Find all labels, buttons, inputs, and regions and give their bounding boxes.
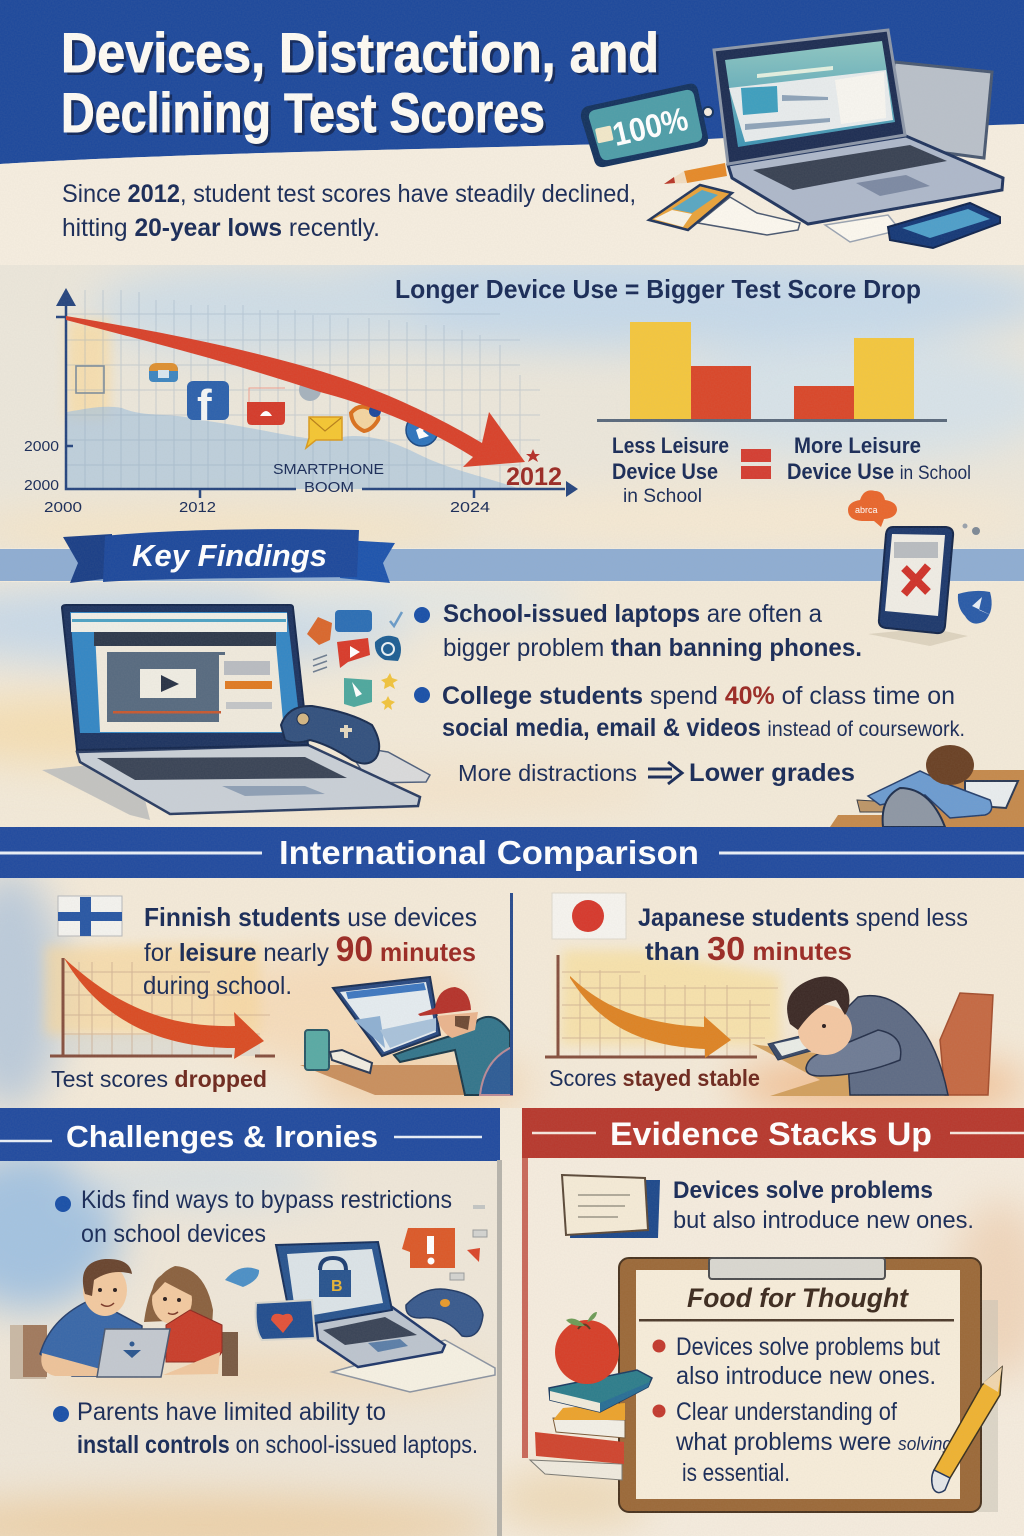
illustration: books and apple [530,1312,652,1480]
panel left border [522,1158,528,1458]
clipboard [619,1258,981,1512]
icon: globe [299,379,321,401]
icon: envelope [306,417,342,448]
axis labels: 2000 [24,478,59,494]
axis labels: 2000 [24,439,59,455]
intro text: hitting 20-year lows recently. [62,214,380,242]
game controller [281,706,379,764]
blue hills [67,407,520,489]
icon: video [247,388,285,425]
bullet: college students: social media, email & videos instead of coursework. [442,714,965,742]
key findings section wash [0,582,644,826]
shadow behind clipboard [978,1300,998,1512]
flag of Finland [58,896,122,936]
phone on desk [649,185,732,230]
panel: Evidence Stacks Up [522,1108,1024,1512]
vertical divider [510,893,513,1095]
bullet: solve problems: also introduce new ones. [676,1362,936,1390]
empty square marker [76,366,104,393]
left bar label: Less Leisure [612,433,729,458]
bar chart: leisure device use [395,274,971,507]
bullet: understanding: is essential. [682,1459,790,1487]
right bar label: Device Use in School [787,459,971,484]
international comparison header: International Comparison [279,834,699,871]
illustration: locked laptop and accessories: B [331,1278,343,1295]
intro background wash [0,124,1024,265]
shared laptop [97,1329,170,1377]
flag of Japan [552,893,626,939]
bullet: solve problems: Devices solve problems but [676,1333,940,1361]
right bar label [787,433,971,484]
axis labels: 2024 [450,500,490,516]
key findings ribbon: Key Findings [132,538,327,573]
Japan chart [545,950,780,1058]
international comparison header [0,827,1024,878]
bullet: college students: College students spend 40% of class time on [442,682,955,710]
laptop screen [714,30,905,164]
bullet: bypass restrictions: Kids find ways to bypass restrictions [81,1186,452,1214]
icon: document stack [562,1175,660,1238]
bullet: parental controls [53,1398,478,1459]
laptop screen [62,605,308,750]
distractions result: Lower grades [689,759,855,787]
findings text [414,600,965,787]
100% badge [581,84,713,167]
axes [56,300,565,498]
header band [0,0,1024,164]
illustration: locked laptop and accessories [225,1205,495,1392]
Finland result: Test scores dropped [51,1066,267,1092]
icon: blue badge [406,414,438,446]
icon: speech bubble: abrca [855,505,878,515]
Japan text: Japanese students spend less [638,904,968,932]
bullet: laptops [414,600,862,662]
second screen [893,62,992,158]
icon: speech bubble [848,490,897,527]
title: Declining Test Scores [61,81,545,144]
Finland text: during school. [143,972,292,1000]
illustration: laptop with video [42,605,430,820]
2012 callout: 2012 [506,463,562,491]
evidence header: Evidence Stacks Up [610,1116,932,1152]
illustration: student asleep at desk [830,745,1024,827]
smartphone boom label [273,461,384,496]
Japan text: than 30 minutes [645,930,852,967]
illustration: student resting on desk [752,976,993,1096]
bullet: understanding: what problems were solving [675,1428,952,1456]
smartphone boom label: BOOM [304,479,354,496]
Finland text: for leisure nearly 90 minutes [144,930,476,969]
illustration: pencil [932,1367,1002,1493]
bullet: laptops: bigger problem than banning phones. [443,634,862,662]
left bar label: Device Use [612,459,718,484]
icon: burst [369,405,381,417]
bars [597,322,947,422]
notes [698,197,800,235]
bullet: understanding [652,1398,952,1487]
axis labels: 2000 [44,500,82,516]
axis labels [24,439,490,516]
panel edge [497,1160,502,1536]
bullet: parental controls: install controls on school-issued laptops. [77,1431,478,1459]
evidence text: but also introduce new ones. [673,1207,974,1234]
panel: Finland [45,896,512,1095]
Finland chart [45,944,275,1059]
paper under laptop [42,760,150,820]
clipboard title: Food for Thought [687,1283,909,1313]
red decline arrow [66,316,525,467]
bullet: understanding: Clear understanding of [676,1398,897,1426]
icon: facebook [187,381,229,430]
laptop base [77,745,420,814]
illustration: two kids on a laptop [10,1259,238,1379]
chart section wash [0,250,1024,552]
Finland text [143,902,477,1000]
smartphone boom label: SMARTPHONE [273,461,384,478]
evidence text: Devices solve problems [673,1177,933,1204]
icon: shield [351,407,378,431]
orange wash [67,320,110,420]
key findings ribbon [63,529,395,583]
distractions result: More distractions [458,760,637,786]
bullet: bypass restrictions [55,1186,452,1248]
intro text: Since 2012, student test scores have steadily declined, [62,180,636,208]
title [61,21,662,147]
bullet: solve problems [652,1333,940,1390]
Japan result: Scores stayed stable [549,1065,760,1091]
100% badge: 100% [609,100,691,153]
title: Declining Test Scores [64,84,548,147]
bullet: laptops: School-issued laptops are often a [443,600,822,628]
intro text [62,180,636,242]
evidence section wash [502,1194,1024,1536]
axis labels: 2012 [179,500,216,516]
challenges header: Challenges & Ironies [66,1119,378,1154]
bullet: bypass restrictions: on school devices [81,1220,266,1248]
Japan text [638,904,968,967]
tablet [888,203,1000,248]
bullet: parental controls: Parents have limited ability to [77,1398,386,1426]
icon: phone with red X [868,524,993,646]
evidence header [522,1108,1024,1158]
left bar label [612,433,729,507]
floating app icons [307,610,402,710]
panel: Challenges and Ironies [0,1108,500,1459]
challenges header [0,1108,500,1161]
pencil stub [684,163,727,183]
icon: facebook: f [197,381,212,430]
key findings stripe [0,549,1024,581]
challenges section wash [0,1150,500,1536]
title: Devices, Distraction, and [64,24,662,87]
boy [40,1302,142,1376]
illustration: laptop on desk [581,30,1003,248]
bullet: college students [414,682,965,742]
arrowheads [56,288,578,497]
grid [67,290,540,488]
2012 callout [506,449,562,491]
icon: bus [149,363,178,382]
second device [345,745,430,783]
illustration: student with laptop [300,977,512,1095]
evidence text [673,1177,974,1234]
girl [144,1266,213,1328]
comparison section wash [0,870,1024,1113]
title: Devices, Distraction, and [61,21,659,84]
Finland text: Finnish students use devices [144,902,477,932]
distractions result [458,759,855,787]
left bar label: in School [623,486,702,507]
chart: timeline decline [24,288,578,516]
panel: Japan [545,893,993,1096]
right bar label: More Leisure [794,433,921,458]
chart heading: Longer Device Use = Bigger Test Score Drop [395,274,921,304]
laptop base [728,136,1003,224]
legend swatches [741,449,771,479]
